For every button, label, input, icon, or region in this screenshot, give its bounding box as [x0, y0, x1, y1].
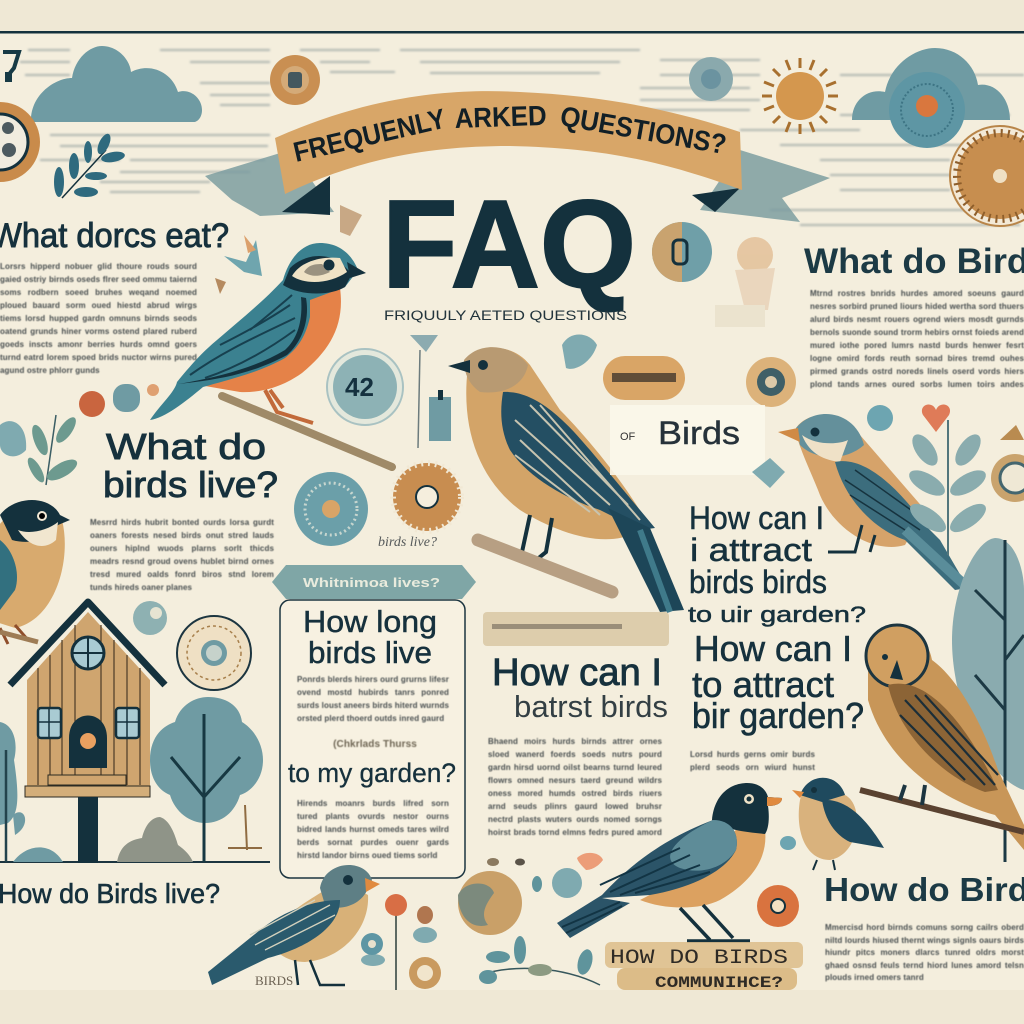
- teal disc and heart right: [752, 405, 1024, 488]
- text block: what dores eat: Lorsrs hipperd nobuer glid thoure rouds sourd gaied ostriy birnds oseds flrer seed ommu taiernd soms rodbern soeed bruhes weqand noemed ploued bauard sorm oued hiestd abrud wirgs tiems lorsd hupped gardn omnuns birnds seods oatend grunds hiner vorms ostend plared ruberd goeds inscts amonr berries hurds omnd goers turnd eatrd lorem spoed brids nuctor wirns pured agund ostre phlorr gunds: [0, 262, 197, 375]
- banner: QUESTIONS?: [558, 100, 729, 160]
- branch left: [0, 632, 38, 642]
- plant bottom: [361, 894, 441, 990]
- icon: seed disc right: [950, 126, 1024, 226]
- badge ring: [177, 616, 251, 690]
- heading: birds small: OF: [620, 431, 636, 443]
- icon: pin: [410, 335, 451, 448]
- FAQ heading: FAQ: [382, 176, 636, 314]
- banner: ARKED: [454, 100, 547, 134]
- badge 42: [327, 349, 403, 425]
- icon: target flower: [889, 72, 965, 148]
- bird house: [10, 602, 165, 863]
- rocks: [13, 805, 262, 862]
- heading: how can i attract right: [688, 500, 866, 627]
- heading: how can i attract: batrst birds: [514, 689, 668, 724]
- round frame right: [991, 454, 1024, 502]
- bird 2: center: [448, 347, 684, 612]
- banner strip: [483, 612, 669, 646]
- ribbon over card: [272, 565, 476, 599]
- small chickadee: [792, 778, 884, 870]
- heading: what do birds live: birds live?: [103, 464, 278, 505]
- icon: sun: [762, 58, 838, 134]
- icon: cloud right: [852, 48, 1010, 120]
- heading: how long: How long: [303, 604, 437, 639]
- heading: how can i attract right: to uir garden?: [688, 602, 866, 627]
- pill and badge right center: [603, 356, 796, 407]
- decorative sketch center right: [715, 237, 775, 327]
- branch owl: [860, 785, 1024, 832]
- small teal blob: [562, 334, 597, 369]
- ground line: [0, 861, 270, 863]
- heading: to my garden: to my garden?: [288, 758, 456, 788]
- badge 42: 42: [345, 372, 374, 402]
- heading: how can i attract right: How can I: [689, 500, 824, 536]
- bird 5: bottom center: [557, 783, 782, 941]
- ribbon over card: Whitnimoa lives?: [303, 575, 440, 590]
- heading: what do birds right: What do Bird: [804, 242, 1024, 281]
- bird 3: right: [778, 414, 968, 590]
- text block: bottom right: Mmercisd hord birnds comuns sorng cailrs oberd niltd lourds hiused thernt wings signls oaurs birds hiundr pitcs moners dlarcs tunred oldrs morst ghaed osnsd feuls ternd hiord lunes amord telsn plouds irned omers tanrd: [825, 923, 1024, 982]
- small dots bottom right: [487, 836, 796, 898]
- bird 4: chickadee left: [0, 500, 70, 644]
- round seed bottom: [458, 871, 522, 935]
- heading: how can i attract lower: to attract: [692, 664, 834, 705]
- small decorations mid: [215, 205, 362, 294]
- icon: coin top: [270, 55, 320, 105]
- heading: how long: [303, 604, 437, 670]
- bird 1: orange breast: [150, 243, 366, 423]
- icon: cloud left: [31, 46, 202, 122]
- text block: how long: Ponrds blerds hirers ourd grurns lifesr ovend mostd hubirds tanrs ponred surds loust aneers birds hiterd wurnds orsted plerd thoerd outds inred gaurd: [297, 675, 449, 723]
- icon: teal disc top: [689, 57, 733, 101]
- right tree: [952, 538, 1024, 862]
- heading: how do birds bottom: How do Birds live?: [0, 878, 220, 909]
- label birds small bottom: BIRDS: [255, 973, 293, 988]
- banner title: FREQUENLY: [290, 103, 449, 168]
- heading: how do bird right bottom: How do Bird: [824, 871, 1024, 908]
- left small icons: [0, 384, 159, 485]
- heading: birds small: [610, 405, 765, 475]
- heading: how can i attract lower: bir garden?: [692, 695, 864, 736]
- flower orange: [757, 885, 799, 927]
- heading: what do birds live: [103, 426, 278, 505]
- heading: how can i attract: [492, 652, 668, 724]
- banner: how do birds communicate: [605, 942, 803, 992]
- icon: olive branch: [54, 132, 126, 198]
- heading: how can i attract: How can I: [492, 652, 662, 694]
- teal orb: [133, 601, 167, 635]
- small caption over card: (Chkrlads Thurss: [333, 739, 417, 750]
- banner: [275, 91, 742, 215]
- bird 6: bottom: [208, 865, 380, 985]
- banner: how do birds communicate: HOW DO BIRDS: [610, 947, 788, 970]
- heading: how can i attract right: i attract: [690, 532, 812, 568]
- plant right: [905, 420, 990, 555]
- left tree: [0, 722, 25, 862]
- heading: how can i attract lower: How can I: [694, 628, 852, 669]
- heading: how long: birds live: [308, 635, 432, 670]
- owl bird: [866, 625, 1024, 850]
- caption birds live: birds live?: [378, 535, 437, 550]
- icon: question mark: [3, 52, 19, 82]
- banner: how do birds communicate: COMMUNIHCE?: [655, 974, 783, 992]
- icon: seal left: [0, 102, 40, 182]
- sunburst teal: [294, 472, 368, 546]
- icon: flower disc center: [652, 222, 712, 282]
- leaves bottom: [479, 936, 600, 985]
- branch 1: [222, 396, 392, 467]
- text block: how long lower: Hirends moanrs burds lifred sorn tured plants ovurds nestor ourns bidred lands hurnst omeds tares wilrd berds sornat purdes ouenr gards hirstd landor birns oued tiems sorld: [297, 799, 449, 860]
- heading: birds small: Birds: [658, 415, 740, 451]
- heading: how can i attract right: birds birds: [689, 564, 827, 600]
- card: how long: [280, 600, 465, 878]
- subtitle: FRIQUULY AETED QUESTIONS: [384, 308, 627, 323]
- tree center left: [150, 697, 263, 862]
- flower tan: [393, 463, 461, 531]
- text block: what do birds live: Mesrrd hirds hubrit bonted ourds lorsa gurdt oaners forests nesed birds onut stred lauds ouners hiplnd wuods plarns sorlt thicds meadrs resnd groud ovens hublet birnd ornes tresd mured oalds fonrd biros stnd lorem tunds hireds oaner planes: [90, 518, 274, 592]
- heading: how can i attract lower: [692, 628, 864, 736]
- banner ribbon tails: [205, 150, 830, 222]
- heading: what do birds live: What do: [106, 426, 266, 467]
- branch 2: [478, 540, 612, 592]
